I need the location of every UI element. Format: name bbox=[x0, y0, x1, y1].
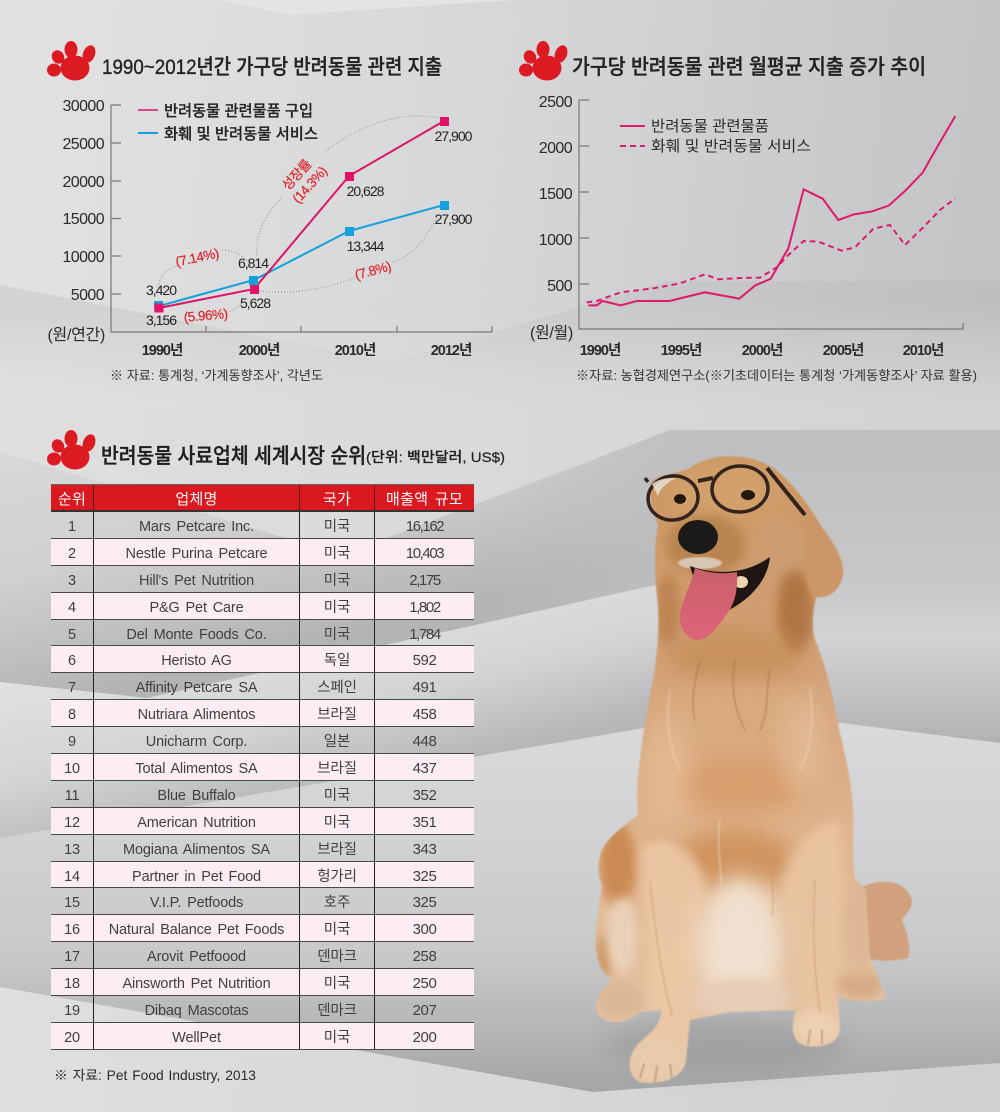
row 5: Del Monte Foods Co. bbox=[126, 627, 267, 643]
paw icon: chart 1 heading bbox=[47, 41, 98, 80]
row 5: 1,784 bbox=[409, 626, 440, 643]
chart 1: annual spending line chart: (7.14%) bbox=[174, 246, 220, 269]
chart 2: monthly spending trend: 반려동물 관련물품 bbox=[651, 118, 769, 135]
table header row: 업체명 bbox=[175, 491, 218, 508]
row 8: 브라질 bbox=[317, 707, 357, 723]
row 14: 헝가리 bbox=[317, 869, 357, 885]
row 1 bbox=[51, 512, 474, 539]
row 2 bbox=[51, 539, 474, 566]
row 3: 3 bbox=[68, 573, 76, 589]
chart 1: annual spending line chart: 화훼 및 반려동물 서비스 bbox=[164, 125, 318, 143]
chart 1: annual spending line chart: (5.96%) bbox=[183, 306, 228, 325]
row 3: 2,175 bbox=[409, 572, 440, 589]
row 6: Heristo AG bbox=[161, 653, 232, 669]
row 3 bbox=[51, 566, 474, 593]
chart 1: annual spending line chart: 성장률 bbox=[279, 157, 314, 193]
row 10 bbox=[51, 754, 474, 781]
row 2: Nestle Purina Petcare bbox=[126, 546, 267, 562]
row 1: Mars Petcare Inc. bbox=[139, 519, 254, 535]
row 20 bbox=[51, 1023, 474, 1050]
row 20: 20 bbox=[64, 1030, 80, 1046]
chart 1: annual spending line chart: 20,628 bbox=[347, 183, 385, 199]
chart 1: annual spending line chart: (7.8%) bbox=[353, 259, 393, 283]
row 2: 2 bbox=[68, 546, 76, 562]
row 11: 352 bbox=[413, 787, 436, 804]
row 5: 미국 bbox=[324, 627, 350, 643]
row 9: 9 bbox=[68, 734, 76, 750]
chart 2: monthly spending trend: 화훼 및 반려동물 서비스 bbox=[651, 138, 811, 155]
row 7: 스페인 bbox=[317, 680, 357, 696]
source note: chart 2: ※자료: 농협경제연구소(※기초데이터는 통계청 ‘가계동향조사’ 자료 활용) bbox=[576, 368, 977, 383]
chart 2: monthly spending trend: 2000 bbox=[539, 140, 573, 157]
dog ear bbox=[805, 510, 842, 597]
row 6 bbox=[51, 646, 474, 673]
dog eyes bbox=[674, 490, 755, 504]
chart 1: annual spending line chart: 2010년 bbox=[335, 342, 376, 359]
row 20: 미국 bbox=[324, 1030, 350, 1046]
glasses bbox=[645, 465, 805, 523]
row 16: 미국 bbox=[324, 922, 350, 938]
row 10: Total Alimentos SA bbox=[135, 761, 258, 777]
row 18: Ainsworth Pet Nutrition bbox=[122, 976, 271, 992]
row 9: 448 bbox=[413, 733, 436, 750]
chart 1: annual spending line chart: 5,628 bbox=[240, 295, 271, 311]
chart 1: annual spending line chart: 20000 bbox=[62, 174, 105, 191]
row 19 bbox=[51, 996, 474, 1023]
row 19: 207 bbox=[413, 1002, 436, 1019]
chart 1: annual spending line chart: 13,344 bbox=[347, 238, 385, 254]
row 7 bbox=[51, 673, 474, 700]
heading: chart 2: 가구당 반려동물 관련 월평균 지출 증가 추이 bbox=[572, 56, 926, 79]
chart 1: annual spending line chart: 2012년 bbox=[431, 342, 472, 359]
chart 1: annual spending line chart bbox=[48, 98, 492, 359]
table header row: 순위 bbox=[58, 491, 86, 508]
source note: chart 1: ※ 자료: 통계청, ‘가계동향조사’, 각년도 bbox=[110, 368, 323, 383]
chart 1: annual spending line chart: 27,900 bbox=[435, 211, 473, 227]
chart 2: monthly spending trend: 1500 bbox=[539, 186, 573, 203]
row 11 bbox=[51, 781, 474, 808]
row 15: 15 bbox=[64, 895, 80, 911]
chart 2: monthly spending trend: 1995년 bbox=[661, 342, 702, 359]
chart 2: monthly spending trend: (원/월) bbox=[530, 324, 573, 342]
chart 2: monthly spending trend: 1990년 bbox=[580, 342, 621, 359]
chart 1: annual spending line chart: (원/연간) bbox=[48, 326, 105, 344]
row 16 bbox=[51, 915, 474, 942]
dog tongue bbox=[680, 568, 737, 640]
dog tail bbox=[860, 882, 912, 961]
row 20: WellPet bbox=[172, 1030, 221, 1046]
row 16: 16 bbox=[64, 922, 80, 938]
row 9: Unicharm Corp. bbox=[146, 734, 247, 750]
heading: chart 1: 1990~2012년간 가구당 반려동물 관련 지출 bbox=[102, 56, 442, 79]
chart 2: monthly spending trend: 1000 bbox=[539, 232, 573, 249]
row 19: Dibaq Mascotas bbox=[145, 1003, 248, 1019]
chart 1: annual spending line chart: 25000 bbox=[62, 136, 105, 153]
row 20: 200 bbox=[413, 1029, 436, 1046]
row 16: 300 bbox=[413, 921, 436, 938]
row 12: 12 bbox=[64, 815, 80, 831]
row 4 bbox=[51, 593, 474, 620]
chart 2: monthly spending trend: 2000년 bbox=[742, 342, 783, 359]
row 17: 17 bbox=[64, 949, 80, 965]
row 3: 미국 bbox=[324, 573, 350, 589]
table header row bbox=[51, 484, 474, 512]
chart 1: annual spending line chart: 15000 bbox=[62, 211, 105, 228]
row 7: Affinity Petcare SA bbox=[136, 680, 257, 696]
chart 1: annual spending line chart: 30000 bbox=[62, 98, 105, 115]
row 6: 592 bbox=[413, 652, 436, 669]
row 3: Hill's Pet Nutrition bbox=[139, 573, 254, 589]
row 18: 미국 bbox=[324, 976, 350, 992]
chart 1: annual spending line chart: 27,900 bbox=[435, 128, 473, 144]
row 11: 미국 bbox=[324, 788, 350, 804]
chart 1: annual spending line chart: 2000년 bbox=[239, 342, 280, 359]
chart 1: annual spending line chart: 1990년 bbox=[142, 342, 183, 359]
chart 1: annual spending line chart: 3,420 bbox=[146, 282, 177, 298]
row 13: 13 bbox=[64, 842, 80, 858]
chart 2: monthly spending trend bbox=[530, 94, 963, 359]
table header row: 매출액 규모 bbox=[386, 491, 463, 508]
row 15: V.I.P. Petfoods bbox=[150, 895, 243, 911]
chart 1: annual spending line chart: 6,814 bbox=[238, 255, 269, 271]
row 7: 491 bbox=[413, 679, 436, 696]
dog muzzle bbox=[666, 515, 746, 575]
illustration: golden retriever with glasses bbox=[590, 450, 920, 1090]
chart 2: monthly spending trend: 500 bbox=[547, 278, 573, 295]
heading: table: 반려동물 사료업체 세계시장 순위 bbox=[101, 445, 366, 468]
heading: table: (단위: 백만달러, US$) bbox=[366, 449, 505, 465]
row 10: 브라질 bbox=[317, 761, 357, 777]
dog nose bbox=[678, 520, 718, 554]
row 9 bbox=[51, 727, 474, 754]
row 2: 미국 bbox=[324, 546, 350, 562]
row 19: 19 bbox=[64, 1003, 80, 1019]
row 8: 458 bbox=[413, 706, 436, 723]
row 18 bbox=[51, 969, 474, 996]
row 15 bbox=[51, 888, 474, 915]
chart 2: monthly spending trend: 2005년 bbox=[823, 342, 864, 359]
row 13: 브라질 bbox=[317, 842, 357, 858]
row 4: 4 bbox=[68, 600, 76, 616]
row 18: 250 bbox=[413, 975, 436, 992]
chart 1: annual spending line chart: 5000 bbox=[71, 287, 105, 304]
chart 1: annual spending line chart: 3,156 bbox=[146, 312, 177, 328]
row 19: 덴마크 bbox=[317, 1003, 357, 1019]
row 12: 351 bbox=[413, 814, 436, 831]
row 8 bbox=[51, 700, 474, 727]
row 14: Partner in Pet Food bbox=[132, 869, 261, 885]
row 17: 258 bbox=[413, 948, 436, 965]
row 13: Mogiana Alimentos SA bbox=[123, 842, 270, 858]
row 4: 미국 bbox=[324, 600, 350, 616]
row 12 bbox=[51, 808, 474, 835]
chart 2: monthly spending trend: 2010년 bbox=[903, 342, 944, 359]
row 11: 11 bbox=[65, 788, 79, 804]
table header row: 국가 bbox=[323, 491, 351, 508]
row 18: 18 bbox=[64, 976, 80, 992]
row 17 bbox=[51, 942, 474, 969]
paw icon: table heading bbox=[47, 430, 98, 470]
row 12: 미국 bbox=[324, 815, 350, 831]
row 11: Blue Buffalo bbox=[157, 788, 236, 804]
row 8: Nutriara Alimentos bbox=[138, 707, 255, 723]
dog body bbox=[594, 456, 886, 1084]
row 8: 8 bbox=[68, 707, 76, 723]
row 15: 325 bbox=[413, 894, 436, 911]
paw icon: chart 2 heading bbox=[519, 41, 570, 80]
row 14: 14 bbox=[64, 869, 80, 885]
row 12: American Nutrition bbox=[137, 815, 256, 831]
row 2: 10,403 bbox=[406, 545, 443, 562]
row 1: 1 bbox=[68, 519, 76, 535]
source note: table: ※ 자료: Pet Food Industry, 2013 bbox=[54, 1068, 256, 1083]
row 13: 343 bbox=[413, 841, 436, 858]
row 14: 325 bbox=[413, 868, 436, 885]
chart 1: annual spending line chart: 10000 bbox=[62, 249, 105, 266]
row 15: 호주 bbox=[324, 895, 350, 911]
row 5 bbox=[51, 620, 474, 646]
row 1: 16,162 bbox=[406, 518, 443, 535]
chart 2: monthly spending trend: 2500 bbox=[539, 94, 573, 111]
row 14 bbox=[51, 862, 474, 888]
dog mouth bbox=[690, 557, 770, 612]
row 6: 독일 bbox=[324, 653, 350, 669]
row 5: 5 bbox=[68, 627, 76, 643]
row 13 bbox=[51, 835, 474, 862]
row 6: 6 bbox=[68, 653, 76, 669]
row 16: Natural Balance Pet Foods bbox=[109, 922, 284, 938]
row 17: 덴마크 bbox=[317, 949, 357, 965]
chart 1: annual spending line chart: 반려동물 관련물품 구입 bbox=[164, 102, 313, 120]
chart 1: annual spending line chart: (14.3%) bbox=[289, 164, 330, 206]
row 10: 437 bbox=[413, 760, 436, 777]
row 9: 일본 bbox=[324, 734, 350, 750]
row 4: 1,802 bbox=[409, 599, 440, 616]
row 17: Arovit Petfoood bbox=[147, 949, 246, 965]
row 1: 미국 bbox=[324, 519, 350, 535]
row 4: P&G Pet Care bbox=[149, 600, 244, 616]
row 10: 10 bbox=[64, 761, 80, 777]
table: pet food companies world ranking bbox=[51, 484, 474, 1050]
row 7: 7 bbox=[68, 680, 76, 696]
